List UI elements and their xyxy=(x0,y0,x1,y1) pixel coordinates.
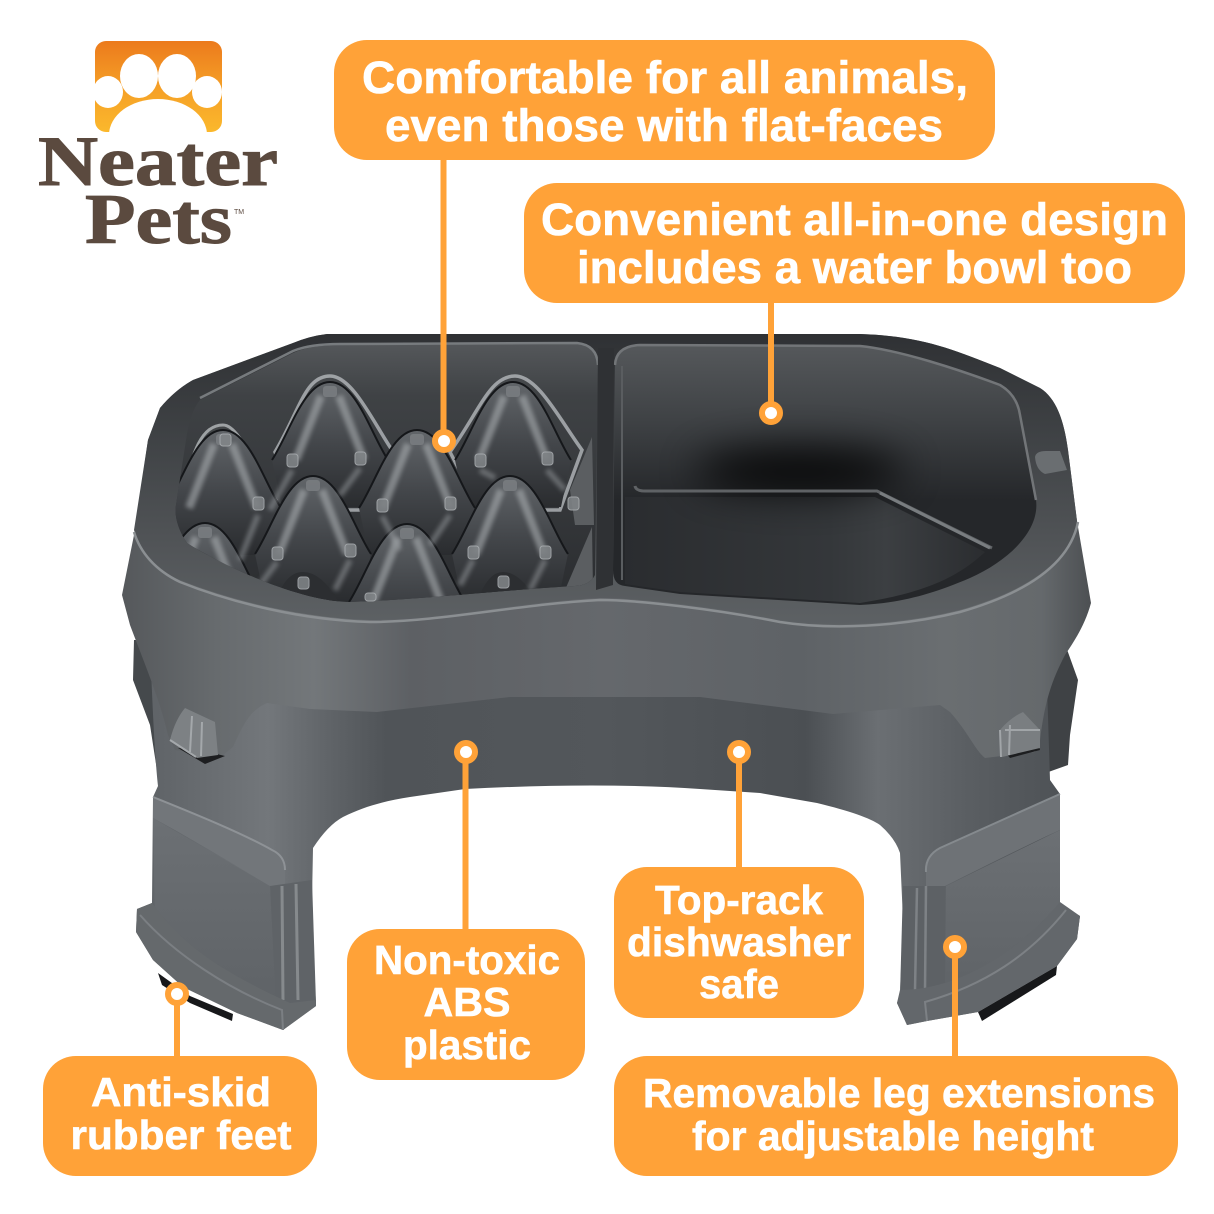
food bowl: slow feeder xyxy=(176,342,598,602)
product: elevated double bowl xyxy=(122,334,1091,1030)
upper band xyxy=(122,334,1091,758)
callout: non-toxic ABS plastic: Non-toxic xyxy=(374,937,560,983)
callout: leg extensions: Removable leg extensions xyxy=(643,1070,1155,1116)
callout: non-toxic ABS plastic xyxy=(347,929,585,1080)
rubber feet xyxy=(158,966,1057,1021)
inner ledge xyxy=(635,486,992,548)
callout: rubber feet xyxy=(43,1056,317,1176)
rim lip highlight xyxy=(134,522,1078,626)
callout: all-in-one design: Convenient all-in-one design xyxy=(541,194,1168,245)
callout: rubber feet: Anti-skid xyxy=(91,1069,271,1115)
leader: ABS plastic xyxy=(457,743,475,931)
callout: dishwasher safe: dishwasher xyxy=(627,919,851,965)
water bowl knob xyxy=(1035,451,1067,474)
callout: non-toxic ABS plastic: ABS xyxy=(424,979,510,1025)
left leg extension details xyxy=(136,797,316,1030)
callout: dishwasher safe: safe xyxy=(699,961,779,1007)
callout: all-in-one design xyxy=(524,183,1185,303)
water bowl xyxy=(613,345,1036,605)
knobs xyxy=(220,434,579,601)
bowl top edge highlight xyxy=(615,345,1036,500)
leader: leg extensions xyxy=(946,938,964,1058)
leader: rubber feet xyxy=(168,985,186,1058)
callout: comfortable for all animals: Comfortable for all animals, xyxy=(362,52,968,103)
callout: leg extensions xyxy=(614,1056,1178,1176)
apron and legs xyxy=(136,640,1080,1030)
callout: comfortable for all animals xyxy=(334,40,995,160)
top rim xyxy=(134,334,1077,624)
leader: comfortable xyxy=(435,158,453,450)
logo: Neater Pets: TM xyxy=(234,209,244,216)
feeder cones xyxy=(176,374,594,602)
deep shadow xyxy=(695,448,905,492)
callout: dishwasher safe: Top-rack xyxy=(655,877,823,923)
logo wordmark: Neater xyxy=(38,123,278,201)
right clip tab xyxy=(1000,712,1040,758)
leader: dishwasher xyxy=(730,743,748,869)
small cones front xyxy=(290,572,338,602)
leader: water bowl xyxy=(762,302,780,422)
callout: leg extensions: for adjustable height xyxy=(692,1113,1094,1159)
callout: all-in-one design: includes a water bowl too xyxy=(577,242,1132,293)
callout: non-toxic ABS plastic: plastic xyxy=(403,1022,531,1068)
valley highlights xyxy=(240,468,565,590)
logo: Neater Pets xyxy=(38,41,278,259)
callout: rubber feet: rubber feet xyxy=(70,1112,292,1158)
logo icon: paw on orange square xyxy=(95,41,222,132)
right leg extension details xyxy=(897,794,1080,1025)
divider between bowls xyxy=(596,348,614,590)
back legs xyxy=(133,630,1078,790)
left clip tab xyxy=(170,708,225,764)
callout: dishwasher safe xyxy=(614,867,864,1018)
logo: Neater Pets: Pets xyxy=(85,181,232,259)
water bowl floor xyxy=(625,497,985,603)
callout: comfortable for all animals: even those with flat-faces xyxy=(385,100,943,151)
